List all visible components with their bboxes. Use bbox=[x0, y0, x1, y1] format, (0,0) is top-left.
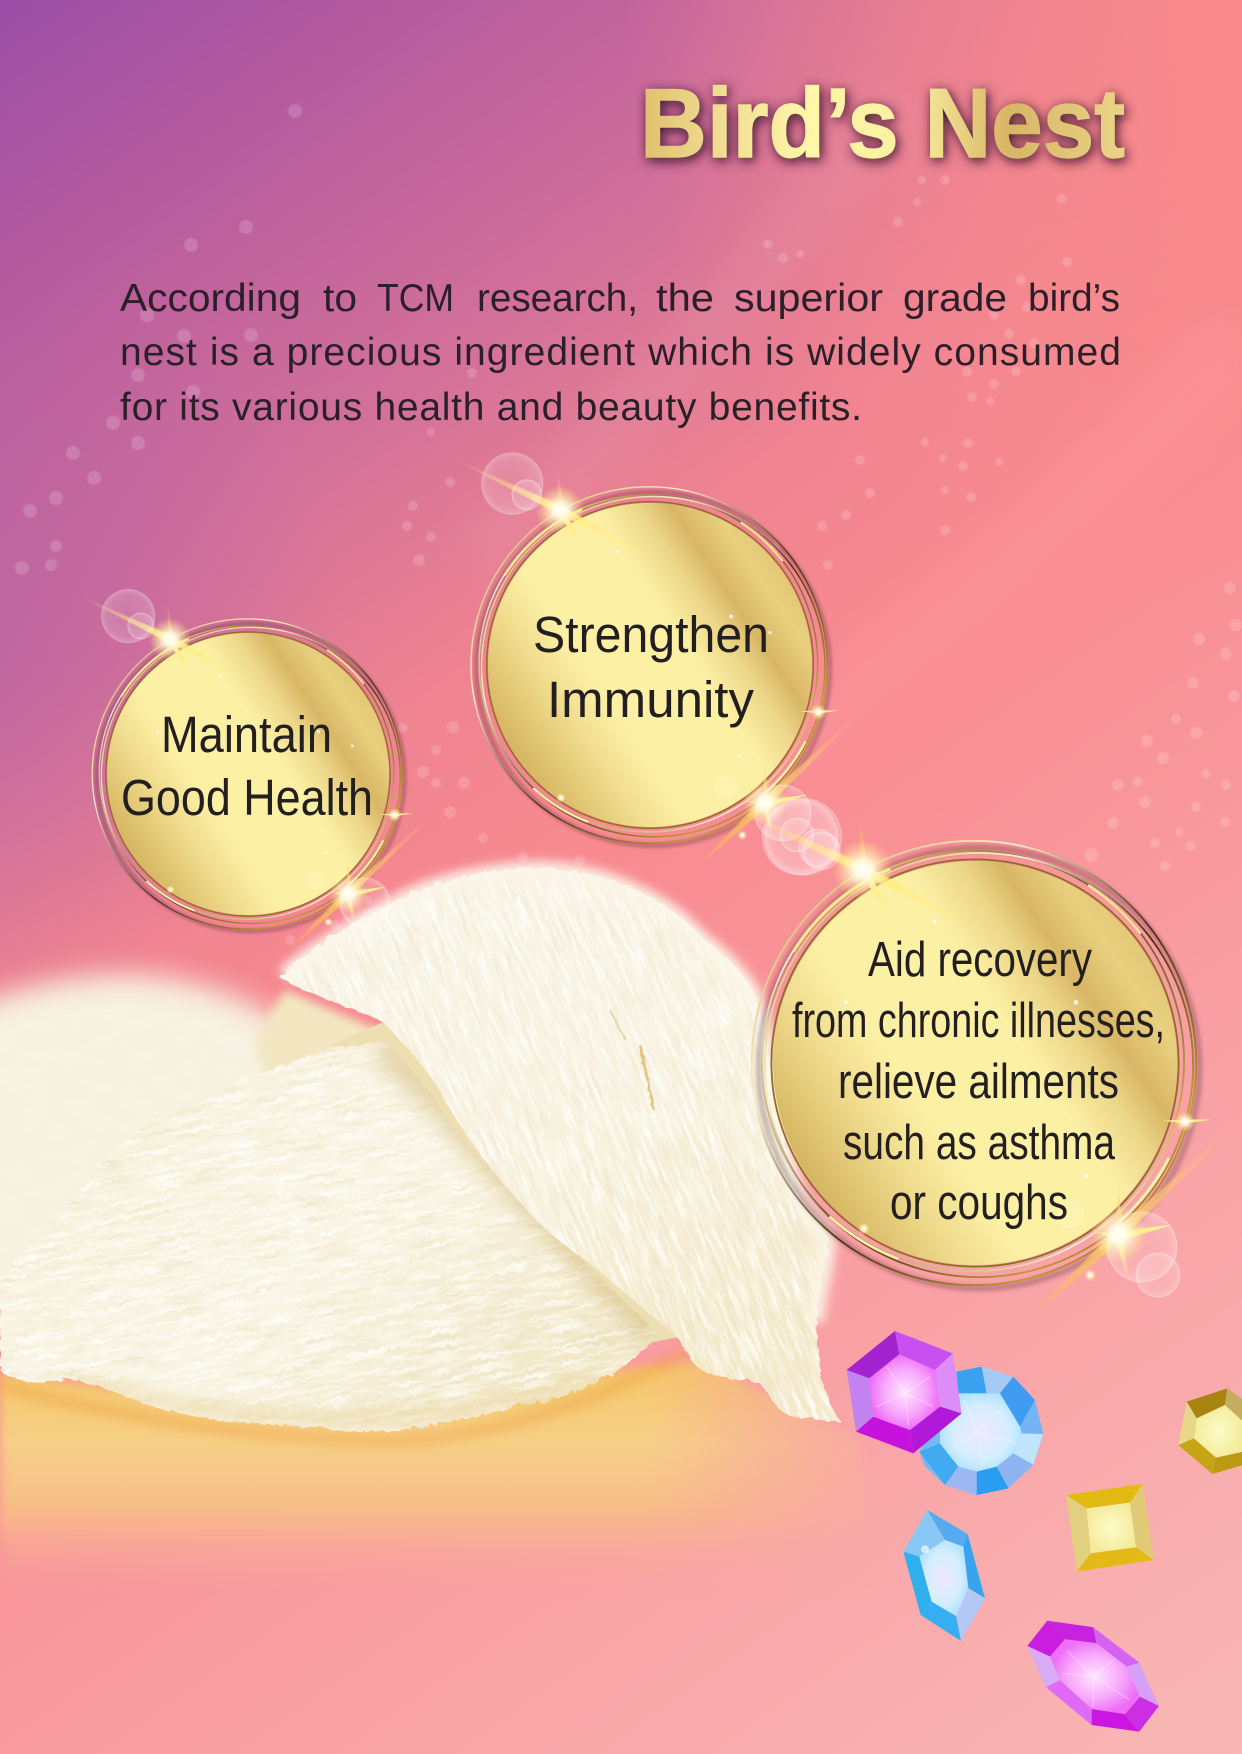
gem: purple long bbox=[1027, 1621, 1159, 1732]
intro line 1: research, bbox=[477, 277, 638, 320]
badge text: Immunity bbox=[547, 671, 754, 728]
seam filler between nests bbox=[330, 1015, 690, 1350]
badge: maintain good health bbox=[75, 589, 437, 962]
intro line 1 bbox=[120, 277, 1120, 320]
cast shadow under nests bbox=[0, 1350, 690, 1441]
badge text bbox=[533, 606, 769, 728]
badge text: Maintain bbox=[161, 706, 332, 763]
title: Bird’s Nest bbox=[640, 68, 1125, 178]
gem: blue crystal bbox=[903, 1510, 985, 1641]
intro line 1: TCM bbox=[377, 277, 454, 320]
gem: blue round bbox=[919, 1367, 1043, 1495]
gems bbox=[847, 1331, 1242, 1732]
badge rings bbox=[92, 619, 405, 931]
intro line 1: grade bbox=[903, 277, 1007, 320]
intro line 2: nest is a precious ingredient which is widely consumed bbox=[120, 331, 1121, 374]
badge text: such as asthma bbox=[843, 1116, 1116, 1170]
badge bubbles bbox=[1107, 1212, 1180, 1297]
badge text: relieve ailments bbox=[838, 1055, 1119, 1109]
gem: purple hexagon bbox=[847, 1331, 962, 1453]
badge bubbles bbox=[755, 785, 838, 875]
badge text: Strengthen bbox=[533, 606, 769, 663]
background light swooshes bbox=[470, 100, 1242, 760]
intro line 1: to bbox=[323, 277, 357, 320]
badge text: Aid recovery bbox=[868, 933, 1092, 987]
intro paragraph bbox=[120, 277, 1121, 429]
badge text bbox=[792, 933, 1165, 1230]
badge disc bbox=[488, 503, 812, 827]
gem: yellow square bbox=[1066, 1484, 1154, 1572]
badge text bbox=[121, 706, 373, 826]
badge: aid recovery bbox=[727, 798, 1242, 1332]
badge rings bbox=[471, 487, 830, 846]
badge rings bbox=[752, 841, 1199, 1288]
intro line 1: According bbox=[120, 277, 301, 320]
intro line 3: for its various health and beauty benefits. bbox=[120, 386, 862, 429]
floating particles bbox=[15, 104, 1242, 1003]
nest: front bbox=[0, 1041, 658, 1432]
intro line 1: superior bbox=[734, 277, 883, 320]
badge flares bbox=[451, 453, 867, 880]
satin cloth bbox=[0, 1358, 849, 1564]
badge flares bbox=[75, 589, 437, 962]
badge text: or coughs bbox=[890, 1176, 1068, 1230]
intro line 1: the bbox=[656, 277, 714, 320]
nest: right large bbox=[279, 866, 842, 1423]
badge disc bbox=[107, 633, 389, 915]
badge bubbles bbox=[340, 878, 392, 938]
gem: yellow hexagon bbox=[1178, 1388, 1242, 1474]
badge flares bbox=[727, 798, 1242, 1332]
bird's nest photo bbox=[0, 586, 1040, 1683]
badge disc bbox=[773, 861, 1177, 1265]
badge text: Good Health bbox=[121, 769, 373, 826]
badge: strengthen immunity bbox=[451, 453, 867, 880]
nest: back left bbox=[0, 974, 390, 1320]
nest: right soft edge bbox=[284, 869, 828, 1322]
intro line 1: bird’s bbox=[1028, 277, 1120, 320]
